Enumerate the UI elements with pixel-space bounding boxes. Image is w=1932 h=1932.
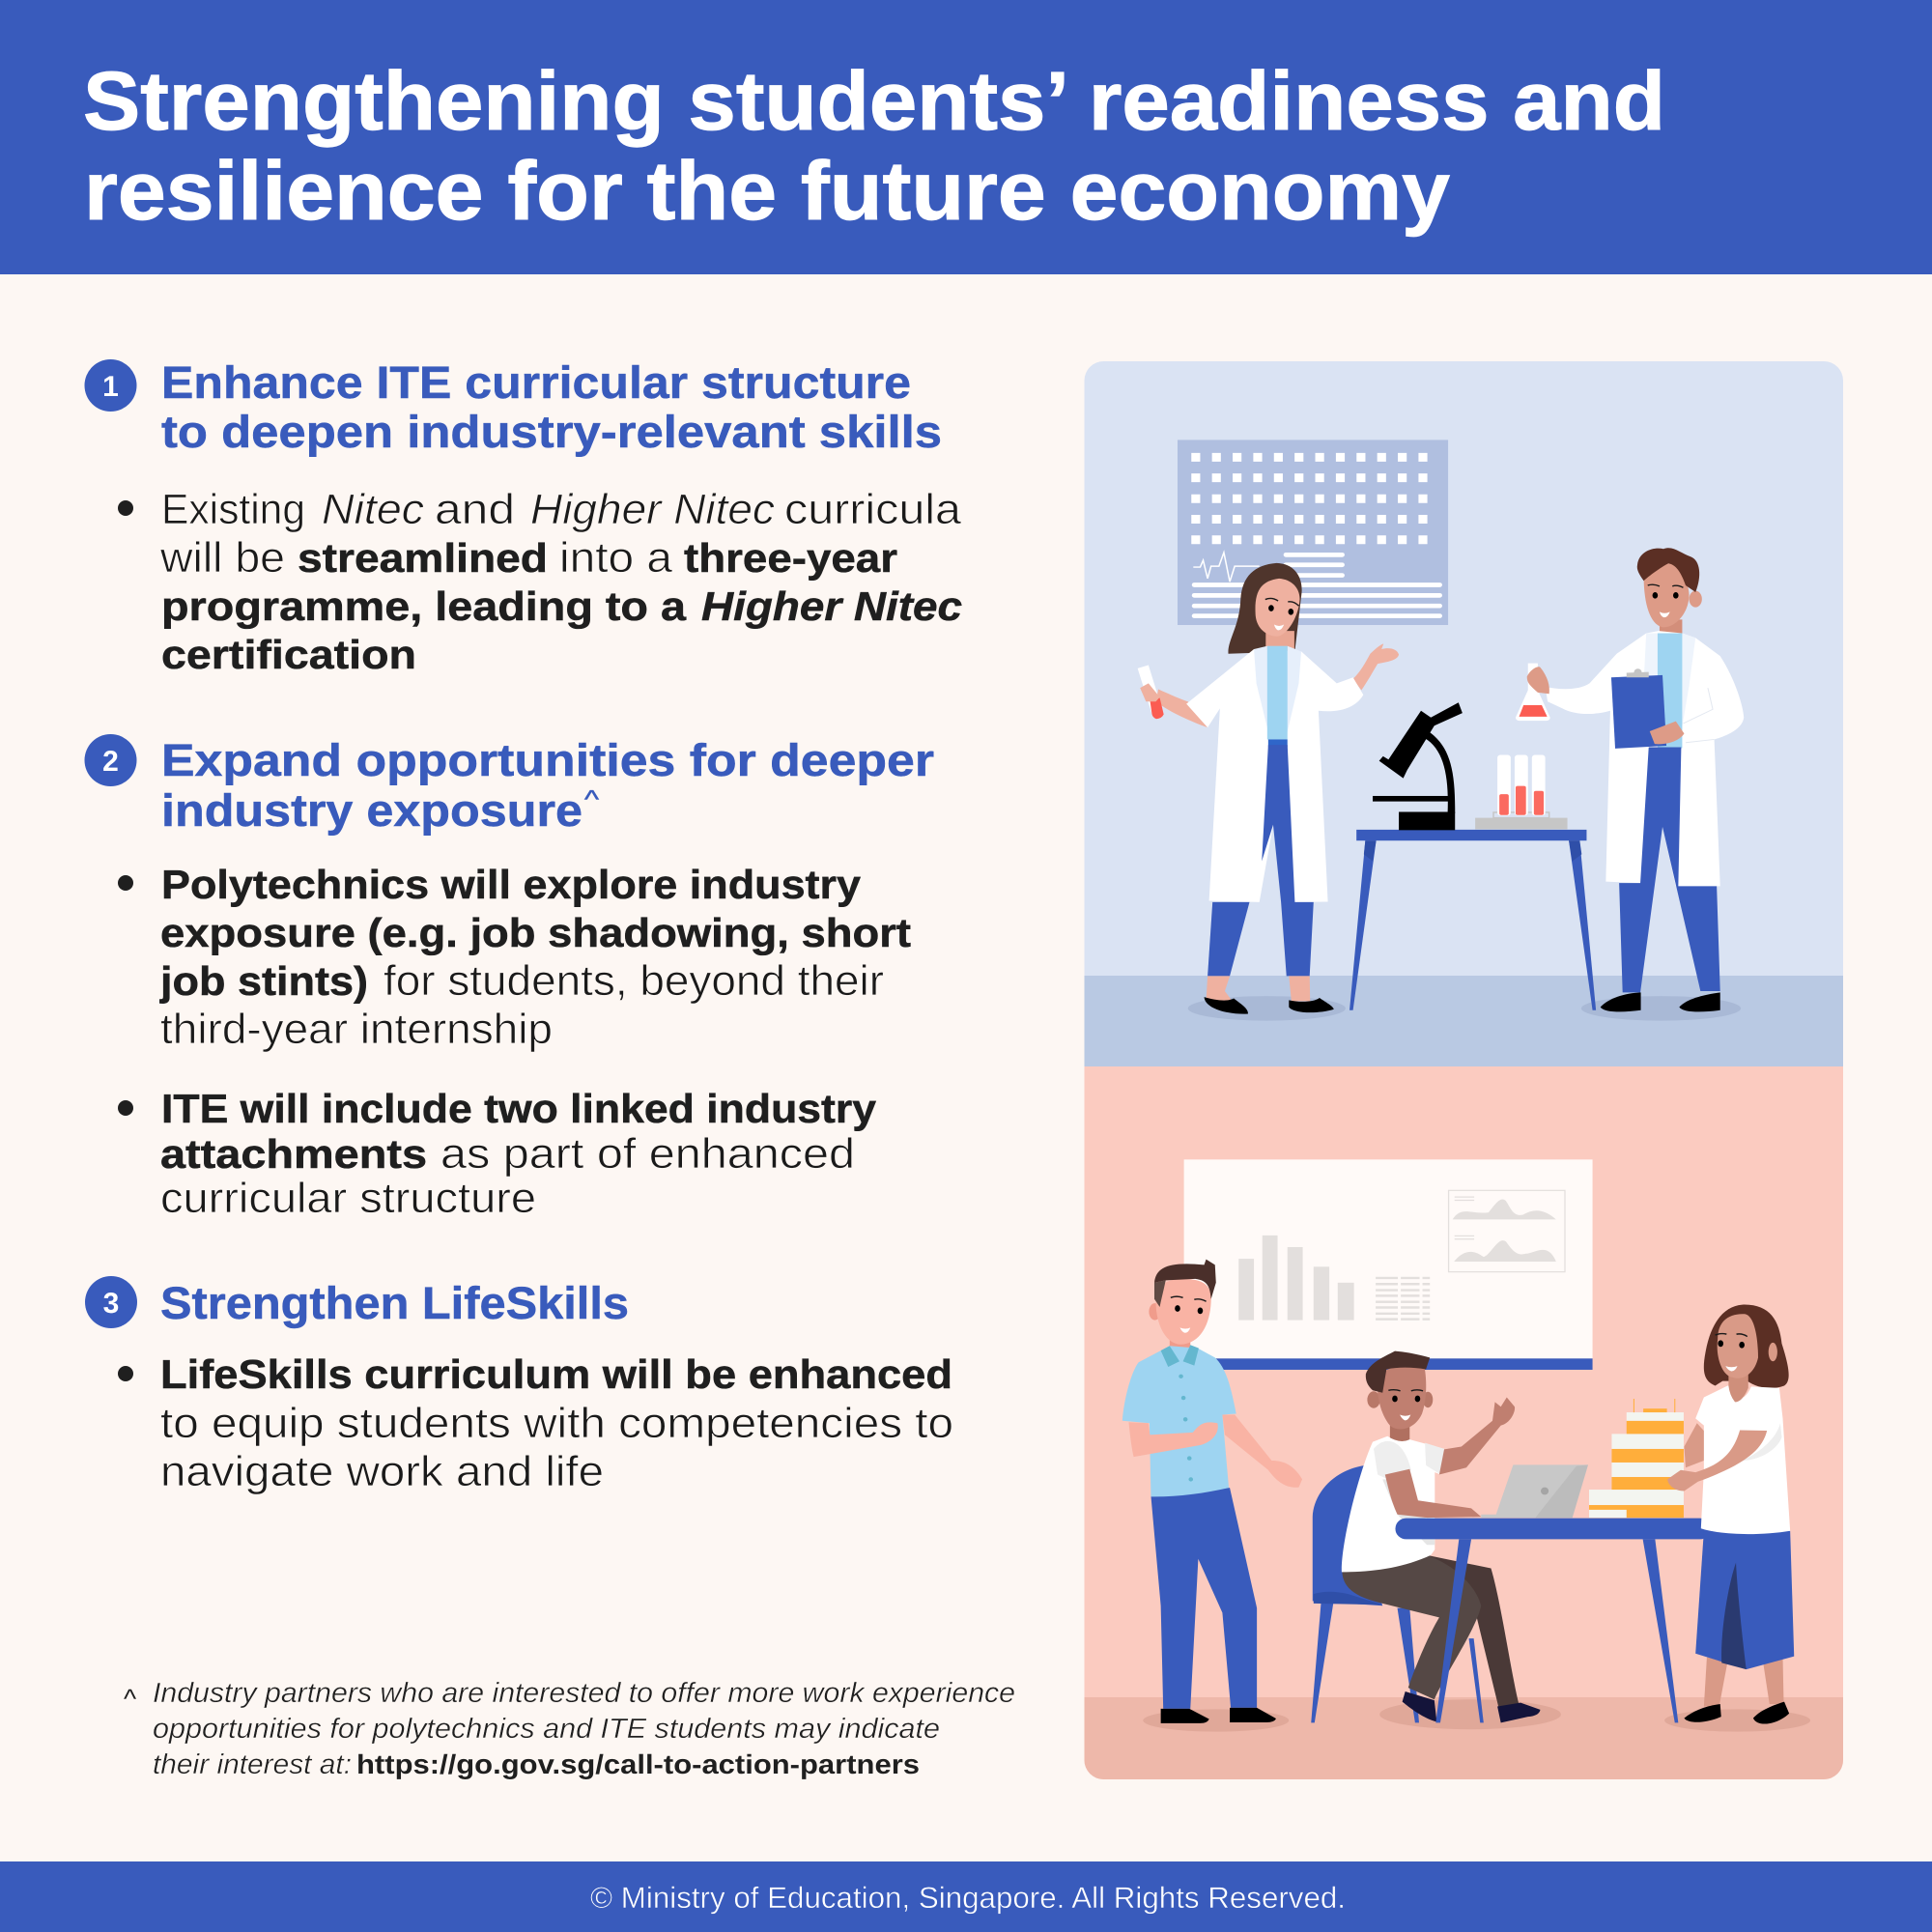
body text 3: LifeSkills curriculum will be enhanced: [160, 1351, 952, 1397]
body text 2b: as part of enhanced: [440, 1130, 855, 1178]
body text 1: Nitec: [322, 486, 424, 533]
number badge 2: 2: [102, 746, 119, 778]
body text 1: will be: [159, 534, 285, 582]
section 1: curricular structure: [85, 356, 962, 677]
bullet: [118, 500, 133, 516]
body text 1: certification: [161, 632, 416, 677]
whiteboard with charts: [1184, 1159, 1593, 1370]
number badge 3: 3: [103, 1288, 119, 1320]
flask: [1516, 664, 1550, 721]
number badge 2: [85, 734, 137, 786]
footnote: opportunities for polytechnics and ITE students may indicate: [153, 1714, 940, 1745]
body text 1: Higher Nitec: [530, 486, 775, 533]
bullet: [118, 1366, 133, 1381]
number badge 1: 1: [102, 371, 119, 403]
heading 3: Strengthen LifeSkills: [160, 1277, 629, 1328]
bullet: [118, 1100, 133, 1116]
test tube rack: [1475, 754, 1568, 829]
panel: lab illustration: [1138, 440, 1744, 1021]
heading 1: [161, 356, 942, 457]
section 3: LifeSkills: [85, 1276, 953, 1495]
heading 2: Expand opportunities for deeper: [161, 734, 934, 785]
title: Strengthening students’ readiness and: [83, 55, 1665, 148]
body text 2a: Polytechnics will explore industry: [161, 862, 862, 907]
bullet: [118, 875, 133, 891]
body text 2a: third-year internship: [160, 1006, 553, 1053]
coat: [1186, 649, 1363, 902]
coat: [1546, 631, 1744, 886]
heading 2: industry exposure: [161, 784, 582, 836]
microscope: [1373, 702, 1463, 830]
body text 1: and: [435, 486, 515, 533]
footnote: Industry partners who are interested to offer more work experience: [153, 1678, 1015, 1709]
shadows: [1143, 1699, 1810, 1732]
table with microscope and test tubes: [1350, 702, 1596, 1010]
footer band: [0, 1861, 1932, 1932]
title: [83, 55, 1665, 238]
footnote: https://go.gov.sg/call-to-action-partners: [356, 1749, 920, 1779]
body text 1: Existing: [161, 486, 305, 533]
book stack: [1589, 1399, 1684, 1518]
footnote: ^: [124, 1684, 136, 1714]
body text 2a: exposure (e.g. job shadowing, short: [160, 910, 911, 955]
heading 2: ^: [584, 784, 600, 813]
number badge 3: [85, 1276, 137, 1328]
panel: office illustration: [1122, 1159, 1810, 1732]
header band with title: [0, 0, 1932, 274]
clipboard: [1611, 675, 1666, 749]
footnote: their interest at:: [153, 1749, 352, 1780]
laptop: [1481, 1464, 1588, 1518]
meeting table: [1395, 1519, 1711, 1722]
footnote: [124, 1678, 1015, 1780]
number badge 1: [85, 359, 137, 412]
body text 1: three-year: [684, 535, 897, 581]
body text 2b: [160, 1086, 877, 1222]
heading 1: to deepen industry-relevant skills: [161, 406, 942, 457]
body text 3: to equip students with competencies to: [160, 1400, 953, 1447]
shadows: [1188, 996, 1741, 1021]
standing woman: [1667, 1305, 1794, 1724]
body text 1: curricula: [784, 486, 962, 533]
woman scientist: [1138, 563, 1399, 1014]
body text 2b: ITE will include two linked industry: [161, 1086, 877, 1131]
body text 2b: attachments: [160, 1131, 427, 1177]
lab arm and tube: [1156, 690, 1208, 727]
chair: [1311, 1465, 1484, 1722]
seated man: [1342, 1351, 1540, 1722]
body text 3: navigate work and life: [160, 1448, 604, 1495]
body text 1: programme, leading to a: [161, 583, 687, 629]
body text 1: [159, 486, 962, 677]
title: resilience for the future economy: [84, 145, 1450, 238]
panel backgrounds: [1084, 361, 1843, 1779]
body text 2b: curricular structure: [160, 1175, 536, 1222]
body text 2a: for students, beyond their: [384, 957, 884, 1005]
heading 2: [161, 734, 934, 836]
copyright: © Ministry of Education, Singapore. All Rights Reserved.: [590, 1881, 1346, 1915]
body text 1: into a: [559, 534, 673, 582]
body text 1: Higher Nitec: [701, 583, 962, 629]
man scientist: [1516, 548, 1744, 1011]
body text 3: [160, 1351, 953, 1495]
section 2: industry exposure: [85, 734, 934, 1222]
body text 2a: job stints): [159, 958, 368, 1004]
body text 2a: [159, 862, 911, 1053]
standing man: [1122, 1260, 1302, 1723]
heading 1: Enhance ITE curricular structure: [161, 356, 911, 408]
body text 1: streamlined: [298, 535, 548, 581]
wall chart: [1178, 440, 1448, 625]
